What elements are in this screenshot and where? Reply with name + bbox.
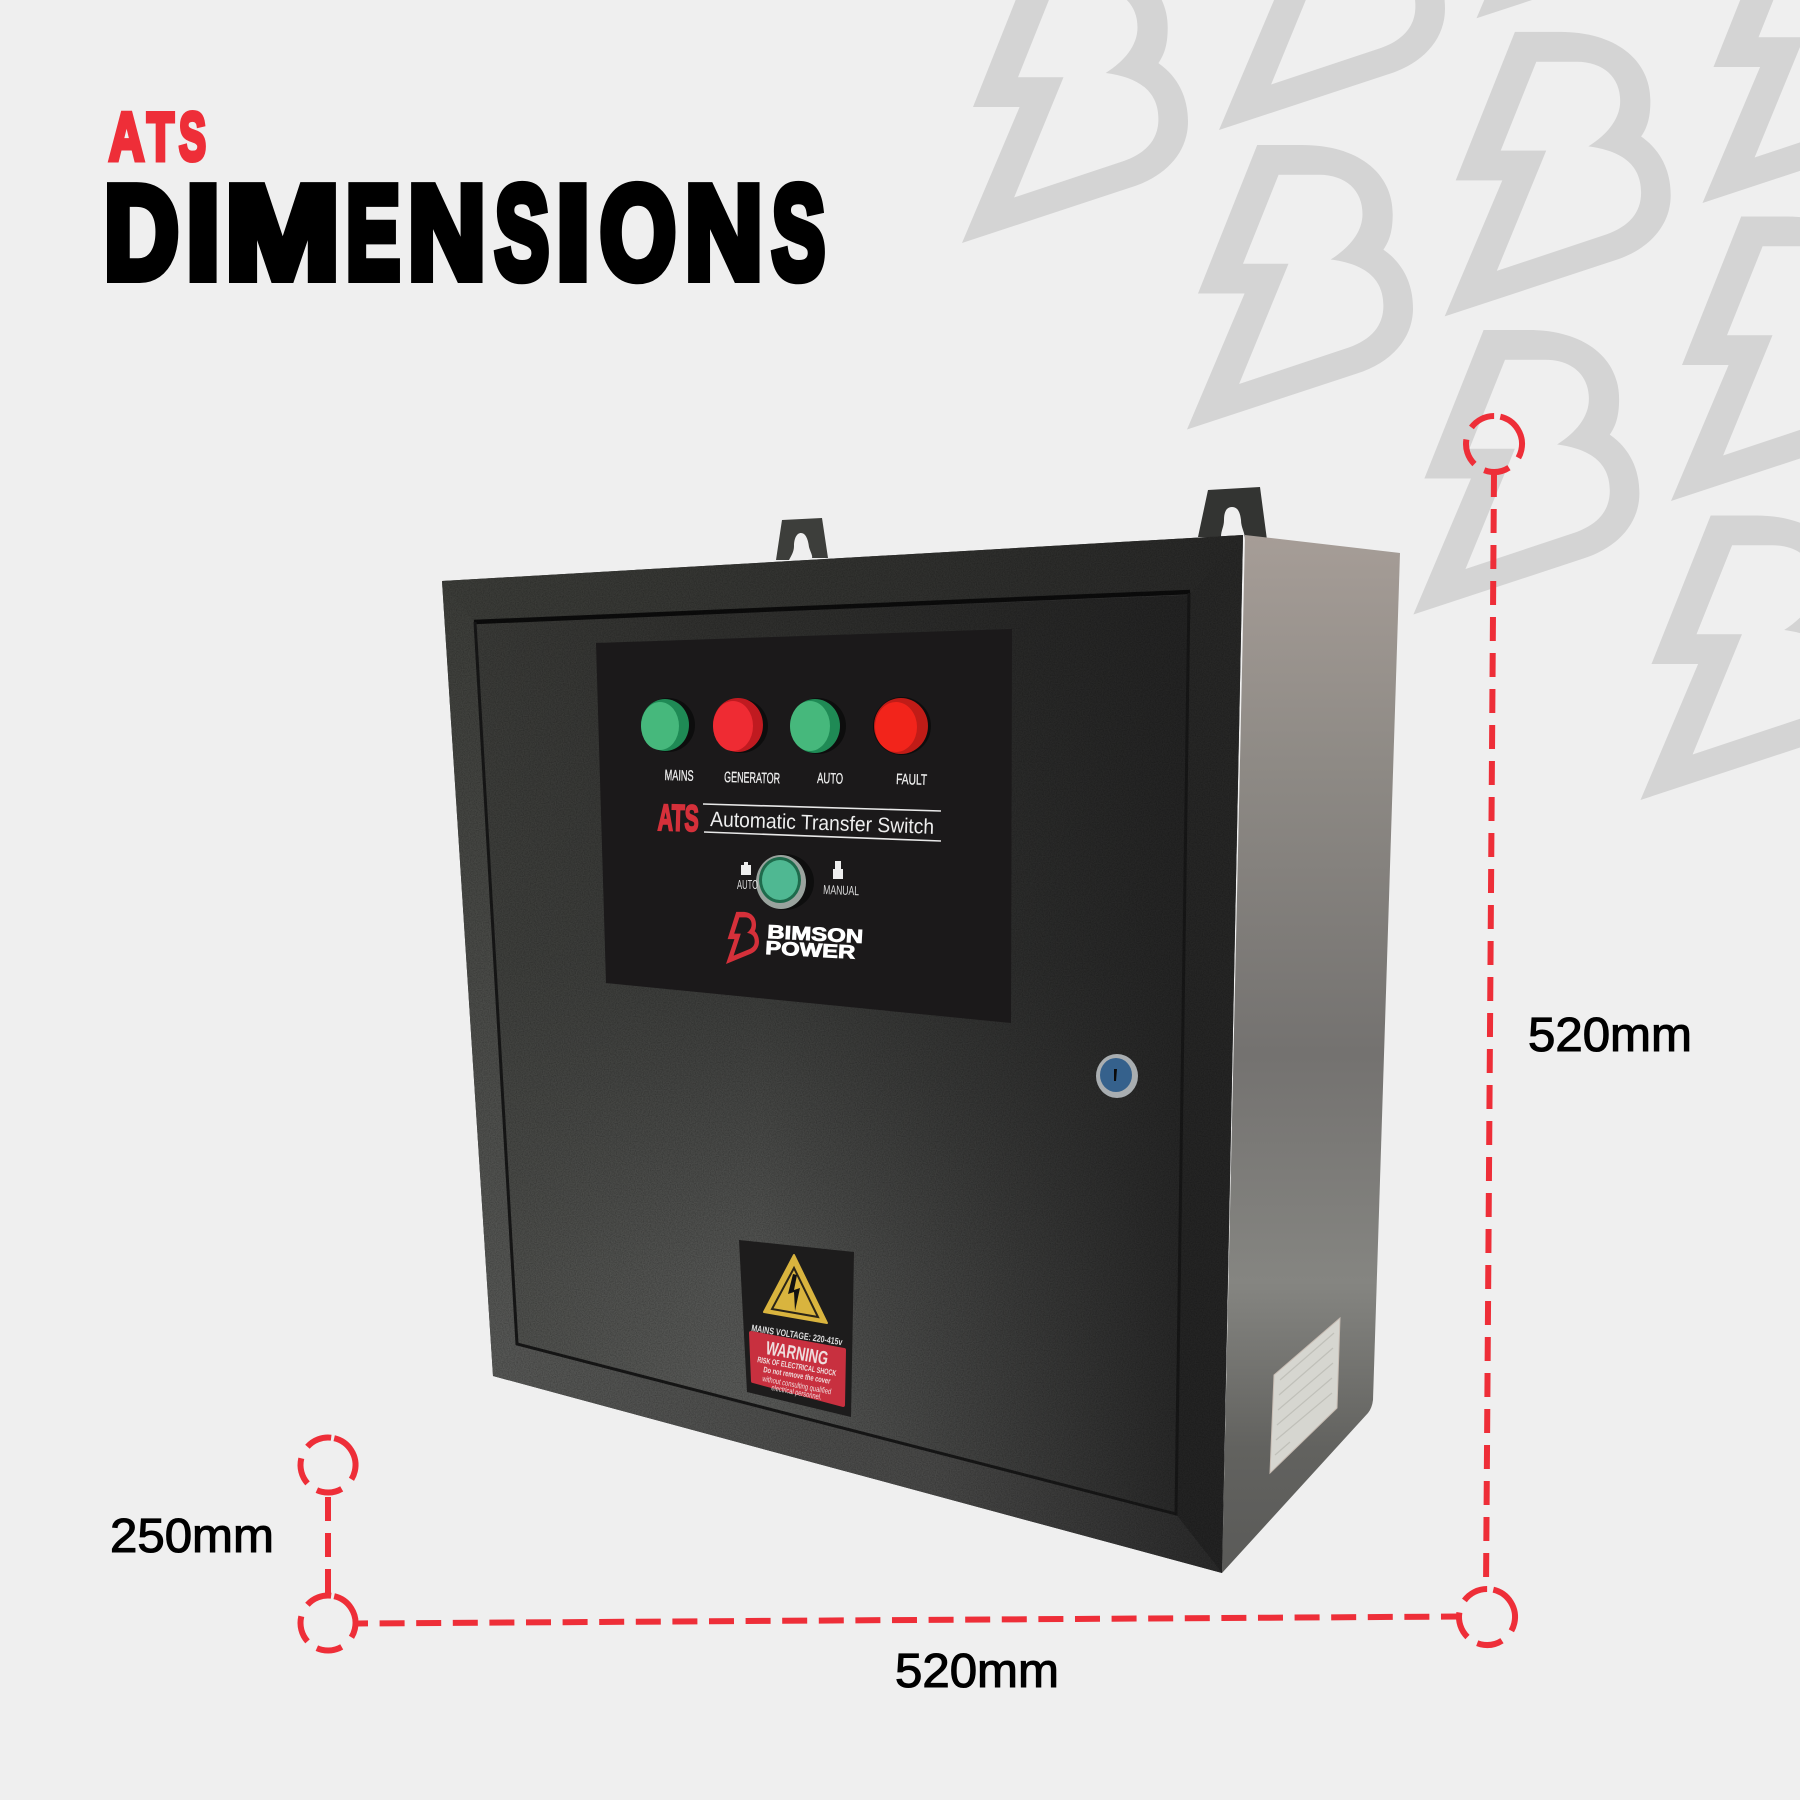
title line: ATS: T: [147, 99, 174, 175]
cabinet door: [474, 592, 1190, 1514]
brand logo on panel: [726, 912, 864, 964]
mounting tab left: [776, 518, 828, 560]
panel rule lines: [703, 804, 941, 841]
label: width 520mm: 520mm: [895, 1645, 1059, 1698]
warning line 2: Do not remove the cover: [763, 1365, 831, 1386]
panel label: FAULT: FAULT: [896, 771, 927, 789]
warning heading: WARNING: [764, 1338, 830, 1370]
panel heading: Automatic Transfer Switch: Automatic Transfer Switch: [710, 808, 934, 839]
height marker top circle: [1460, 410, 1528, 478]
title line: DIMENSIONS: O: [600, 158, 675, 306]
logo bolt B: [726, 912, 759, 964]
title line: DIMENSIONS: I: [556, 158, 590, 306]
warning line 4: electrical personnel.: [771, 1383, 822, 1402]
dimension: width marker: [358, 1583, 1521, 1651]
title line: DIMENSIONS: D: [104, 158, 179, 306]
width dashed line: [358, 1616, 1460, 1624]
label: depth 250mm: 250mm: [110, 1510, 274, 1563]
logo word: BIMSON: BIMSON: [767, 922, 864, 948]
panel ATS mark: ATS: [657, 797, 699, 839]
title line: DIMENSIONS: N: [408, 158, 486, 306]
metal texture: [442, 535, 1243, 1573]
indicator light: generator: [713, 698, 768, 753]
warning line 3: without consulting qualified: [761, 1374, 832, 1396]
warning sticker: [739, 1240, 854, 1417]
title line: ATS: S: [179, 99, 206, 175]
cabinet side face: [1222, 535, 1400, 1573]
title line: DIMENSIONS: [104, 158, 825, 306]
depth marker top circle: [295, 1432, 361, 1498]
selector icon: manual: [833, 861, 843, 879]
voltage text: MAINS VOLTAGE: 220-415v: [751, 1323, 844, 1348]
dimension: depth marker: [295, 1432, 361, 1656]
mounting tab right: [1198, 487, 1267, 540]
panel label: MAINS: MAINS: [664, 767, 694, 785]
width marker corner circle: [1453, 1583, 1521, 1651]
title: [104, 99, 825, 306]
dimension: height marker: [1460, 410, 1528, 1589]
watermark: repeated bolt B logos: [962, 0, 1800, 800]
title line: ATS: A: [109, 99, 144, 175]
selector label: AUTO: AUTO: [737, 877, 758, 892]
door key lock: [1096, 1054, 1138, 1098]
panel label: AUTO: AUTO: [817, 770, 843, 788]
warning triangle icon: [764, 1255, 827, 1323]
title line: DIMENSIONS: M: [225, 158, 340, 306]
title line: ATS: [108, 99, 206, 175]
selector button: [756, 854, 814, 910]
selector icon: auto: [741, 862, 751, 875]
logo word: POWER: POWER: [765, 938, 856, 964]
height dashed line: [1486, 473, 1494, 1589]
red warning box: [751, 1333, 844, 1405]
warning line 1: RISK OF ELECTRICAL SHOCK: [757, 1355, 837, 1378]
title line: DIMENSIONS: I: [186, 158, 220, 306]
selector label: MANUAL: MANUAL: [823, 882, 859, 898]
title line: DIMENSIONS: N: [685, 158, 763, 306]
indicator light: mains: [641, 698, 695, 752]
product: ATS cabinet: [442, 487, 1400, 1573]
rating sticker on side: [1270, 1318, 1340, 1473]
title line: DIMENSIONS: E: [346, 158, 400, 306]
label: height 520mm: 520mm: [1528, 1009, 1692, 1062]
cabinet front frame: [442, 535, 1243, 1573]
panel label: GENERATOR: GENERATOR: [724, 769, 780, 787]
control panel sticker: [596, 629, 1012, 1023]
indicator light: fault: [873, 697, 931, 755]
depth dashed line: [325, 1497, 331, 1593]
title line: DIMENSIONS: S: [495, 158, 549, 306]
title line: DIMENSIONS: S: [772, 158, 825, 306]
indicator light: auto: [790, 698, 846, 754]
depth marker bottom circle: [295, 1590, 361, 1656]
